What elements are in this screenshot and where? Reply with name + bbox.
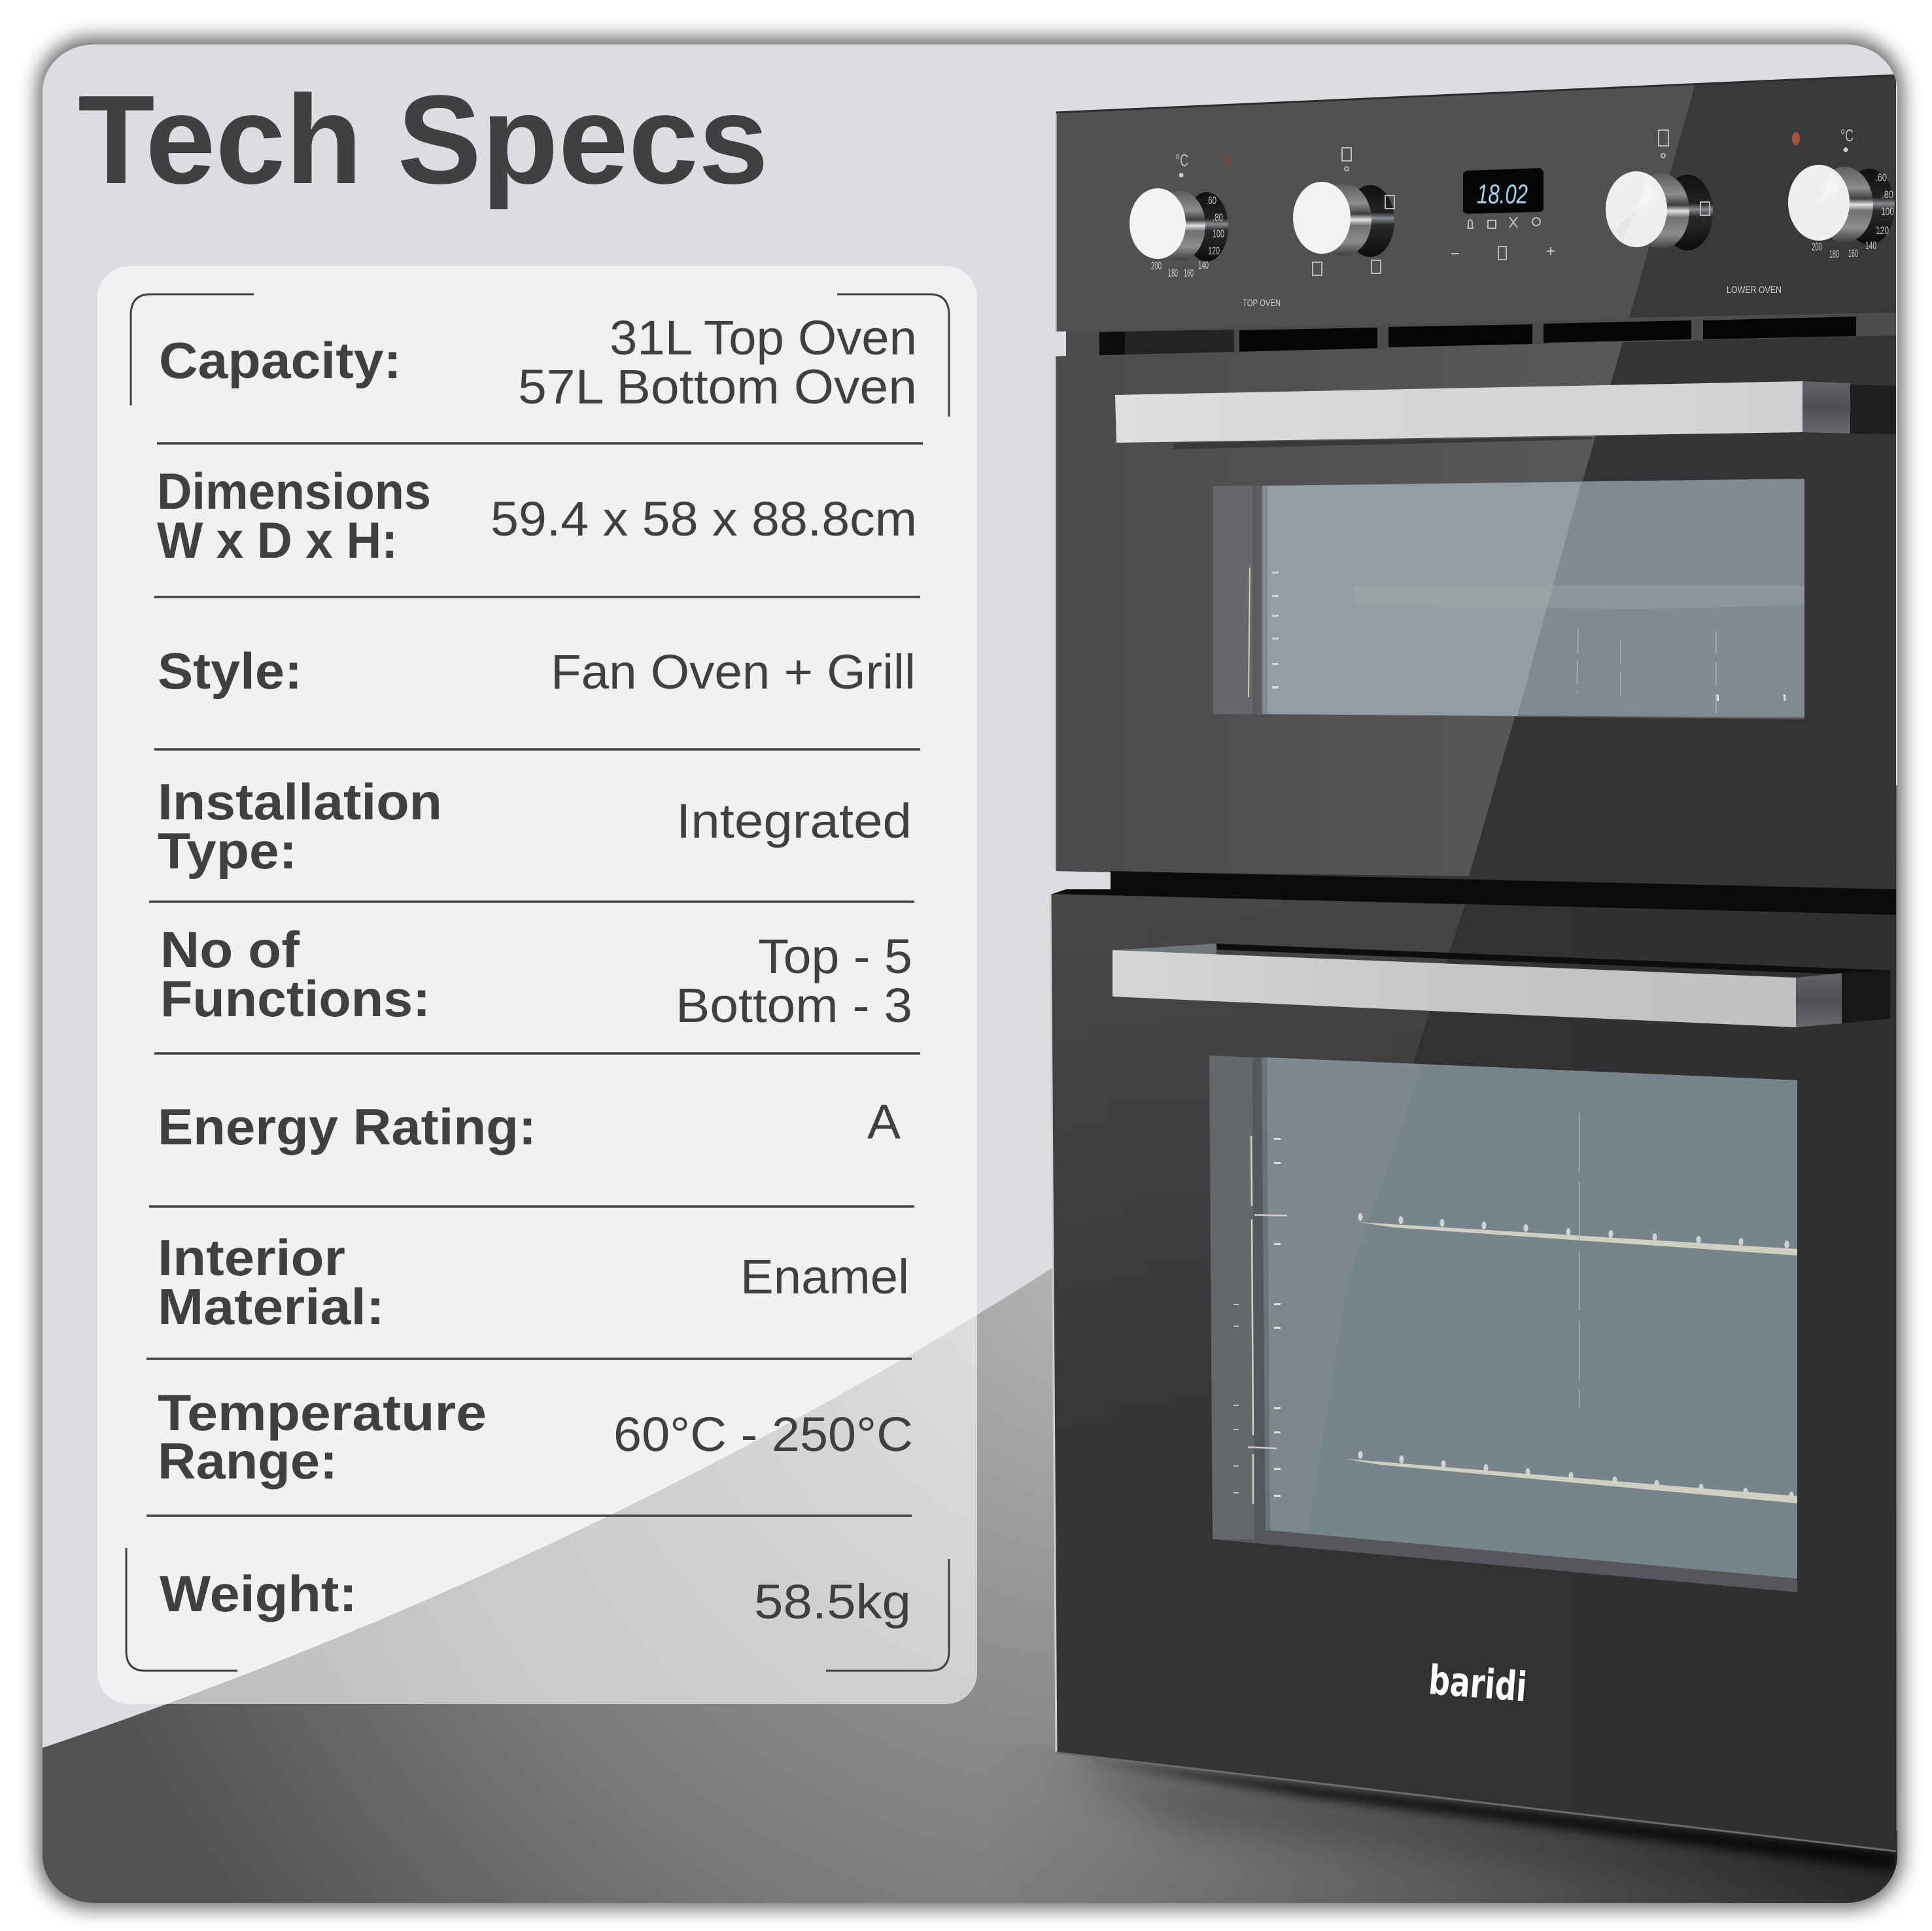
dial scale: top oven: 180 — [1168, 267, 1178, 279]
row: temperature range: 60°C - 250°C — [613, 1407, 913, 1461]
brand logo: baridi — [1427, 1656, 1528, 1711]
knob: lower oven temperature — [1788, 165, 1895, 245]
row: capacity — [159, 311, 917, 414]
row: weight: 58.5kg — [754, 1575, 911, 1629]
bottom oven handle — [1113, 944, 1890, 1027]
row: number of functions — [160, 921, 912, 1033]
row: installation type: Integrated — [676, 794, 912, 848]
top oven label: TOP OVEN — [1243, 298, 1281, 309]
specs panel — [97, 266, 977, 1704]
dial scale: lower oven: 180 — [1829, 248, 1839, 260]
row: style: Style: — [158, 642, 302, 700]
dial scale: top oven: 120 — [1208, 245, 1220, 257]
row: interior material — [158, 1229, 909, 1335]
dial scale: lower oven: .60 — [1875, 171, 1887, 184]
knob: top oven temperature — [1130, 188, 1228, 262]
bottom oven door — [1050, 894, 1896, 1851]
oven rack upper — [1358, 1213, 1797, 1256]
oven rack lower — [1346, 1451, 1797, 1503]
row: temperature range: Range: — [158, 1432, 337, 1490]
lower oven label: LOWER OVEN — [1727, 284, 1782, 296]
dial scale: top oven: .80 — [1213, 211, 1223, 224]
row: energy rating: Energy Rating: — [158, 1098, 536, 1155]
row: weight — [160, 1565, 911, 1629]
row: dimensions: W x D x H: — [157, 511, 398, 569]
bottom oven window — [1209, 1055, 1797, 1592]
dial scale: top oven: 160 — [1184, 267, 1194, 279]
row: dimensions: 59.4 x 58 x 88.8cm — [491, 492, 917, 546]
row: dimensions — [157, 462, 917, 569]
row dividers — [147, 443, 923, 1516]
dial scale: top oven — [1151, 194, 1224, 279]
row: number of functions: Bottom - 3 — [676, 978, 912, 1033]
knob: top oven function — [1293, 182, 1394, 257]
oven floor shadow — [1060, 1754, 1897, 1903]
dial scale: lower oven: 160 — [1848, 247, 1858, 260]
panel icons: °C — [1840, 126, 1854, 145]
top oven door — [1055, 335, 1896, 889]
dial scale: top oven: .60 — [1206, 194, 1216, 207]
dial scale: lower oven: 100 — [1881, 205, 1894, 218]
top oven window — [1213, 479, 1804, 719]
oven — [1050, 75, 1896, 1851]
row: number of functions: Top - 5 — [758, 929, 912, 983]
row: temperature range — [158, 1384, 913, 1490]
dial scale: top oven: 100 — [1213, 228, 1224, 240]
dial scale: lower oven: .80 — [1882, 188, 1893, 201]
dial scale: top oven: 140 — [1198, 259, 1209, 271]
row: interior material: Material: — [158, 1278, 385, 1335]
row: energy rating — [158, 1095, 901, 1155]
row: temperature range: Temperature — [158, 1384, 487, 1441]
row: interior material: Enamel — [740, 1250, 909, 1304]
row: capacity: 57L Bottom Oven — [518, 360, 917, 414]
row: number of functions: Functions: — [160, 970, 430, 1027]
row: installation type: Installation — [158, 773, 442, 830]
dial scale: lower oven: 120 — [1876, 224, 1889, 237]
row: capacity: Capacity: — [159, 332, 402, 389]
corner brackets — [126, 294, 949, 1671]
clock display: 18.02 — [1477, 179, 1528, 209]
row: style: Fan Oven + Grill — [551, 645, 916, 699]
knob: lower oven function — [1606, 171, 1713, 250]
dial scale: lower oven — [1812, 171, 1894, 260]
gap between doors — [1050, 871, 1896, 915]
row: style — [158, 642, 916, 700]
row: interior material: Interior — [158, 1229, 345, 1286]
row: installation type: Type: — [158, 822, 297, 880]
clock display — [1463, 168, 1544, 214]
panel icons — [1175, 126, 1854, 275]
dial scale: lower oven: 140 — [1865, 239, 1876, 252]
row: energy rating: A — [867, 1095, 901, 1149]
row: capacity: 31L Top Oven — [610, 311, 917, 365]
vent gap — [1066, 313, 1896, 356]
control panel — [1056, 75, 1896, 332]
row: dimensions: Dimensions — [157, 462, 431, 520]
title: Tech Specs — [78, 69, 768, 210]
row: weight: Weight: — [160, 1565, 357, 1622]
row: number of functions: No of — [160, 921, 300, 978]
dial scale: lower oven: 200 — [1812, 241, 1822, 253]
panel icons: °C — [1175, 150, 1188, 170]
side rails — [1233, 1136, 1287, 1504]
dial scale: top oven: 200 — [1151, 260, 1162, 272]
top oven handle — [1115, 381, 1896, 449]
floor wedge — [43, 785, 1897, 1903]
row: installation type — [158, 773, 912, 880]
